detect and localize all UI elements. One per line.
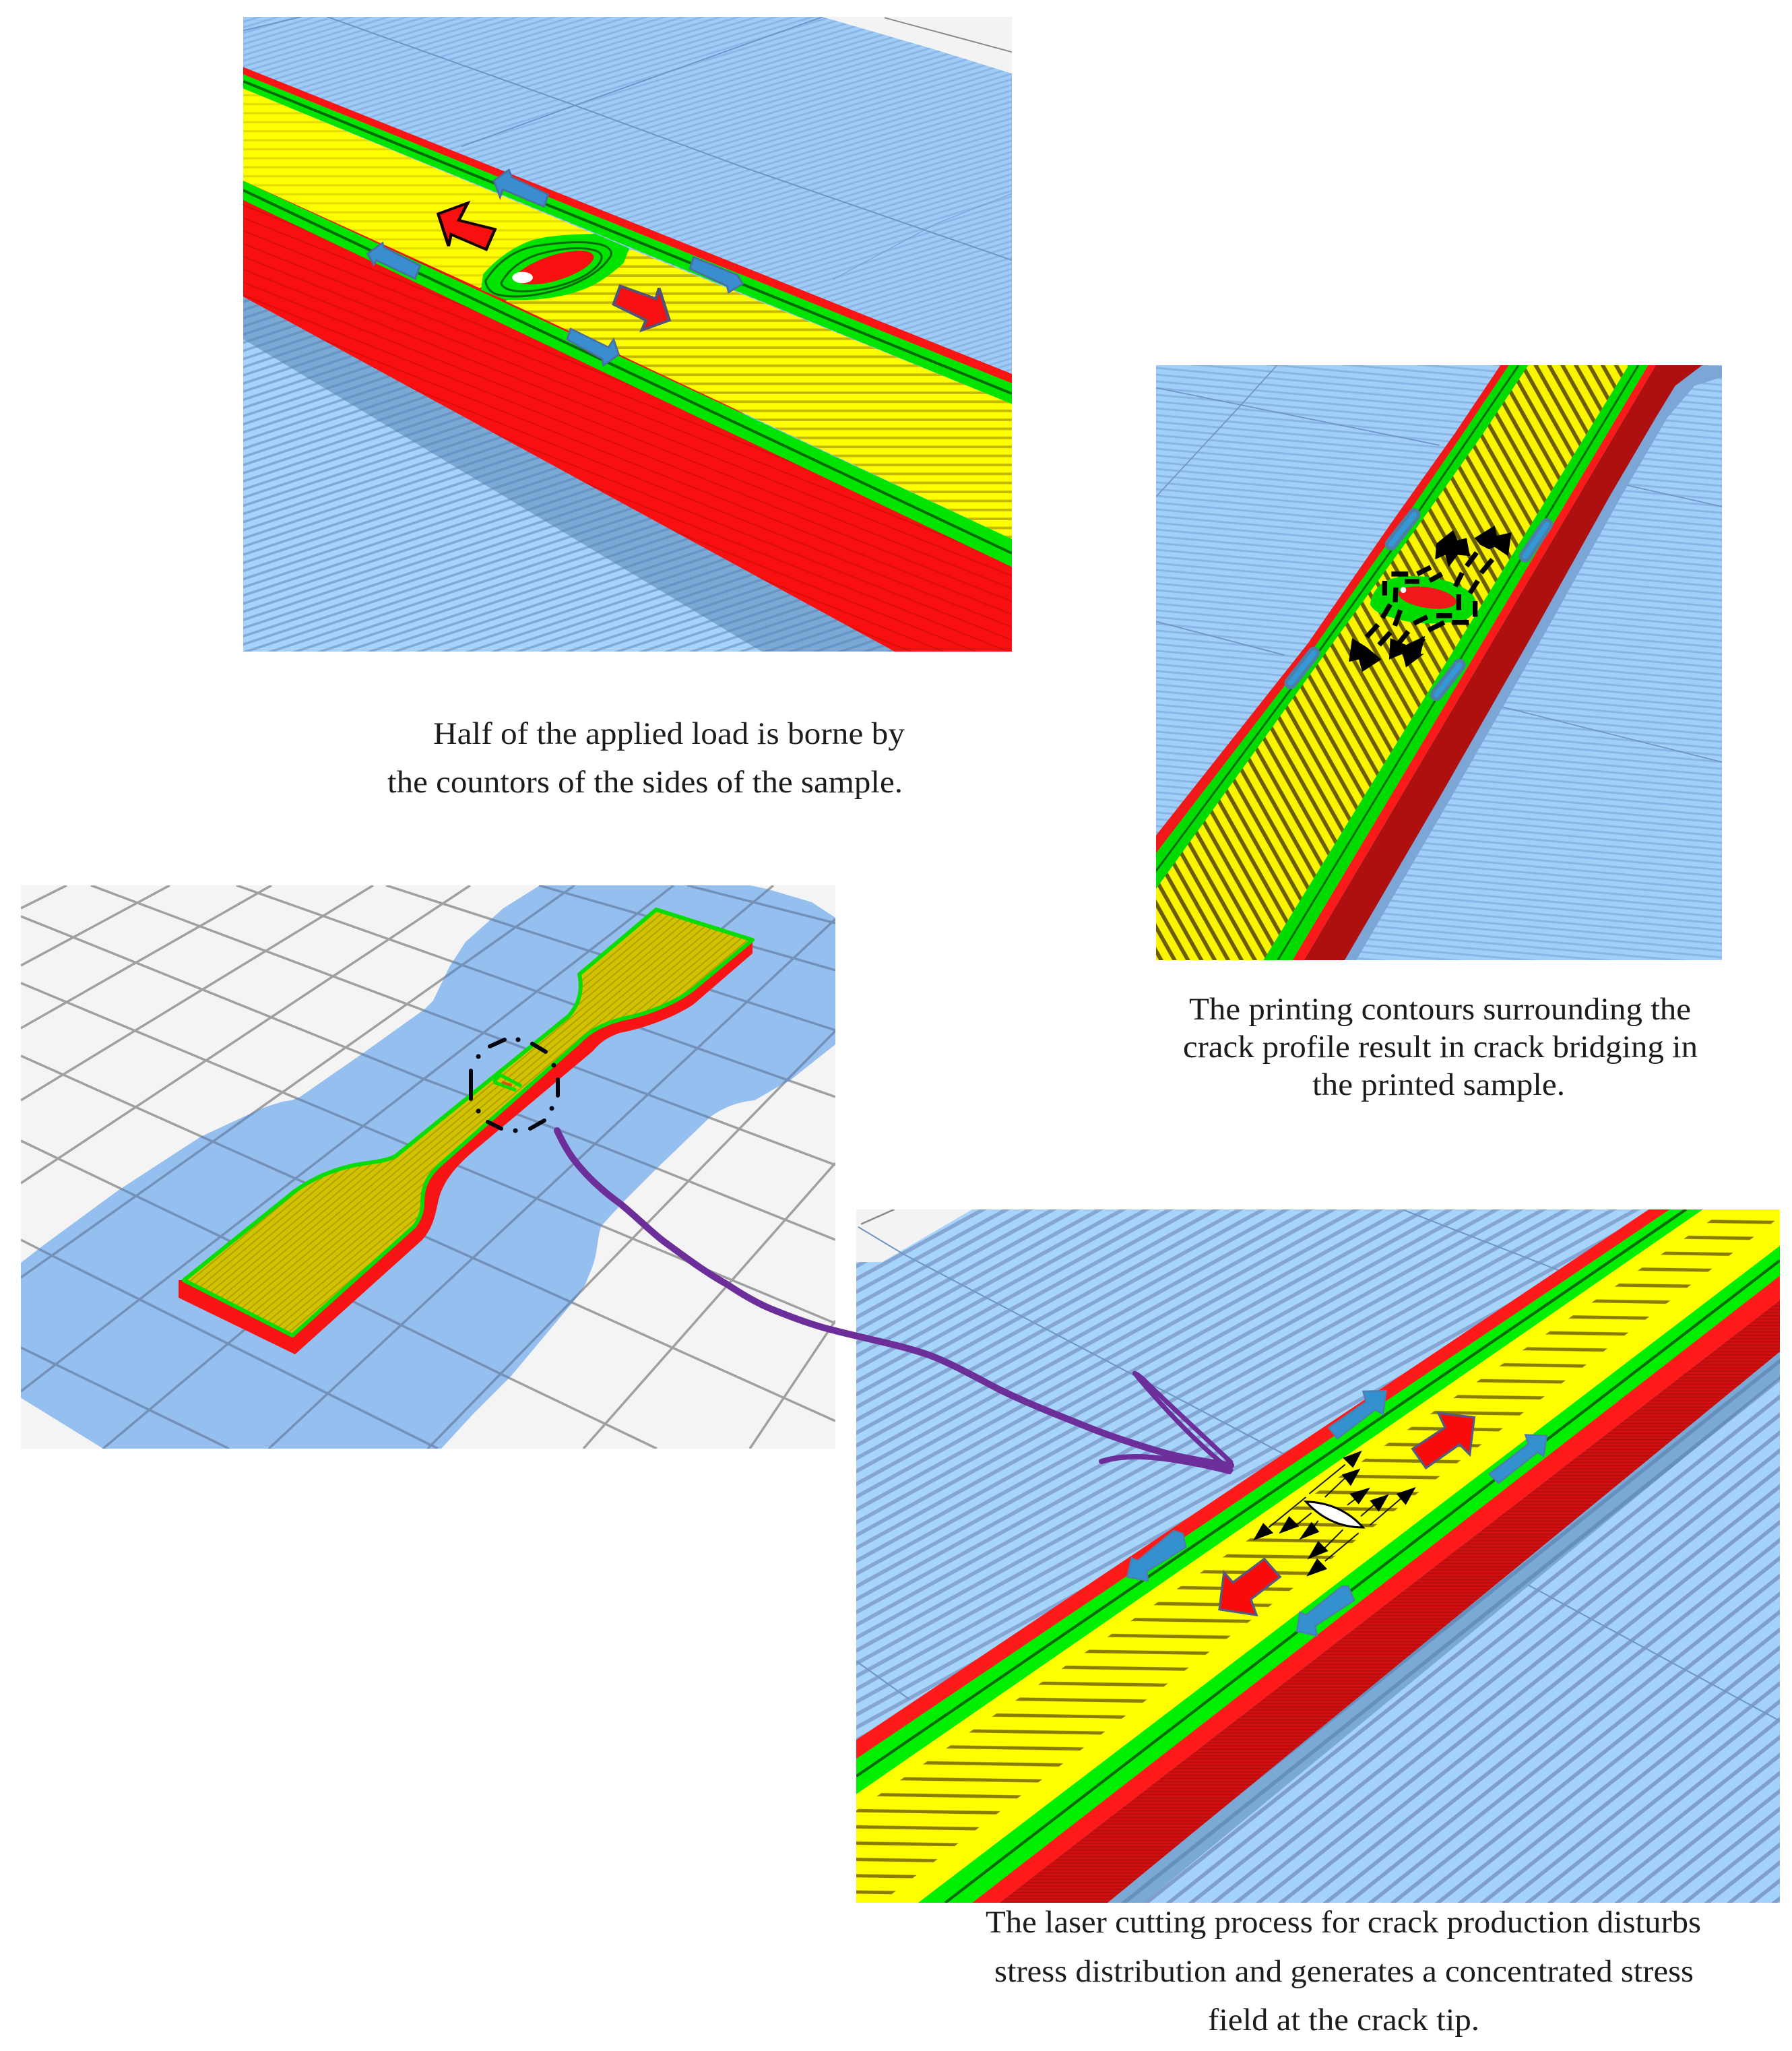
panel: left overview of dog-bone specimen [21, 885, 835, 1449]
text: lower right panel caption: field at the crack tip. [1208, 2002, 1479, 2038]
crack with dashed stress arrows [1349, 526, 1512, 672]
specimen strip [243, 67, 1012, 652]
arrow: red load arrow pointing right [614, 286, 670, 330]
text: right panel caption: crack profile result in crack bridging in [1183, 1030, 1698, 1065]
raft background [856, 1209, 1780, 1903]
panel: top close-up, load borne by side contours [243, 17, 1012, 652]
text: right panel caption: The printing contours surrounding the [1189, 992, 1691, 1027]
specimen strip [856, 1209, 1780, 1903]
crack with surrounding contours [481, 234, 629, 300]
raft outline [20, 885, 835, 1449]
specimen strip [1156, 365, 1702, 960]
callout: dash-dot circle around crack [471, 1040, 558, 1131]
text: right panel caption [1183, 992, 1698, 1102]
text: lower right panel caption: stress distribution and generates a concentrated stress [994, 1954, 1694, 1989]
text: right panel caption: the printed sample. [1312, 1067, 1565, 1102]
specimen: dog-bone tensile sample [179, 910, 753, 1354]
text: top panel caption [387, 716, 905, 800]
text: lower right panel caption: The laser cutting process for crack production disturbs [986, 1905, 1701, 1940]
panel: right close-up, crack bridging [1156, 365, 1722, 960]
panel: lower right close-up, laser-cut crack [856, 1209, 1780, 1903]
build plate grid [21, 885, 835, 1449]
text: lower right panel caption [986, 1905, 1701, 2038]
icons: blue contour load markers [1291, 515, 1547, 695]
raft grid overlay [21, 885, 835, 1449]
text: top panel caption: the countors of the sides of the sample. [387, 765, 903, 800]
build plate background [21, 885, 835, 1449]
arrow: red load arrow pointing left [438, 203, 495, 249]
raft background [243, 17, 1012, 652]
raft background [1156, 365, 1722, 960]
arrows: blue contour load arrows [1128, 1391, 1547, 1636]
crack with stress concentration arrows [1219, 1413, 1474, 1615]
arrow: purple hand-drawn arrow from overview circle to close-up [557, 1131, 1231, 1472]
text: top panel caption: Half of the applied load is borne by [433, 716, 905, 751]
arrows: blue contour load arrows [368, 170, 742, 365]
